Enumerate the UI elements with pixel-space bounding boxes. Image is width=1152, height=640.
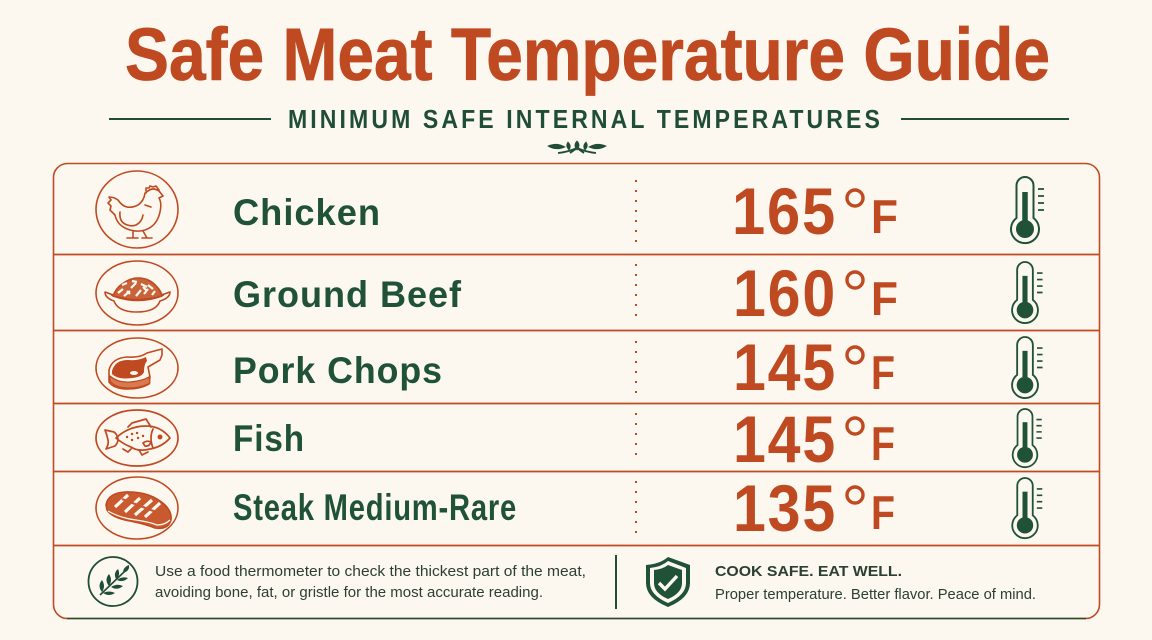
subtitle: MINIMUM SAFE INTERNAL TEMPERATURES	[288, 104, 883, 134]
temperature: 145	[733, 402, 837, 476]
row: ground beef	[96, 256, 1043, 330]
label: Chicken	[233, 192, 381, 233]
title: Safe Meat Temperature Guide	[125, 13, 1050, 96]
temperature: 165	[732, 174, 837, 248]
icon: chicken	[96, 171, 178, 248]
temperature: F	[871, 417, 895, 470]
temperature: F	[871, 346, 895, 399]
icon: thermometer	[1012, 262, 1043, 323]
icon: thermometer	[1013, 409, 1042, 467]
closing message	[715, 563, 1036, 603]
label: Pork Chops	[233, 350, 443, 391]
row: pork chops	[96, 330, 1043, 404]
footer tip	[88, 555, 1036, 609]
row: fish	[96, 402, 1042, 476]
icon: laurel ornament	[548, 141, 606, 153]
temperature: F	[871, 486, 895, 539]
closing message: COOK SAFE. EAT WELL.	[715, 563, 902, 580]
icon: thermometer	[1012, 478, 1042, 538]
label: Fish	[233, 418, 305, 459]
label: Ground Beef	[233, 274, 462, 315]
panel: temperature table	[53, 164, 1100, 618]
temperature: F	[871, 272, 898, 325]
tip text	[155, 564, 586, 601]
icon: herb sprig	[88, 557, 138, 606]
icon: thermometer	[1011, 177, 1044, 243]
temperature: 145	[733, 330, 837, 404]
row: steak	[96, 471, 1042, 545]
tip text: Use a food thermometer to check the thickest part of the meat,	[155, 564, 586, 580]
icon: fish	[96, 410, 178, 466]
temperature: 135	[733, 471, 837, 545]
row: chicken	[96, 171, 1044, 248]
closing message: Proper temperature. Better flavor. Peace of mind.	[715, 587, 1036, 603]
icon: ground beef bowl	[96, 261, 178, 325]
temperature	[732, 174, 898, 248]
icon: pork chop	[96, 338, 178, 398]
icon: thermometer	[1012, 337, 1043, 398]
temperature: F	[871, 190, 898, 243]
label: Steak Medium-Rare	[233, 487, 517, 528]
icon: steak	[96, 477, 178, 539]
tip text: avoiding bone, fat, or gristle for the most accurate reading.	[155, 585, 543, 601]
icon: shield	[646, 557, 690, 607]
temperature: 160	[733, 256, 837, 330]
